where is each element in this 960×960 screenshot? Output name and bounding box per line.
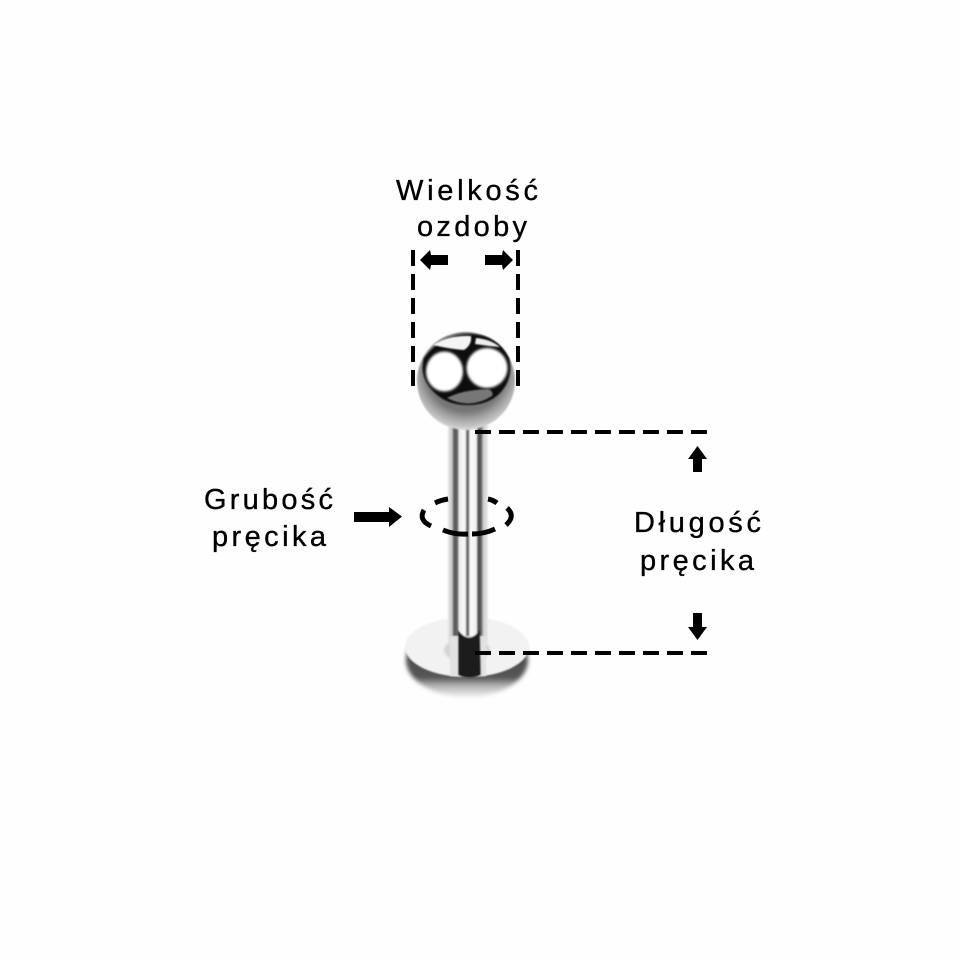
icon: ball end	[417, 332, 515, 430]
label: rod length	[634, 507, 761, 577]
arrow: ornament size left	[420, 250, 448, 270]
label: rod thickness: pręcika	[212, 521, 327, 553]
arrow: rod length down	[688, 613, 707, 640]
label: rod length: Długość	[634, 507, 761, 539]
icon: labret piercing	[405, 332, 529, 697]
dashed lines: ornament width guides	[413, 250, 518, 386]
arrow: ornament size right	[485, 250, 513, 270]
icon: flat disc back	[405, 617, 529, 697]
label: ornament size: ozdoby	[417, 211, 528, 243]
label: rod thickness	[204, 484, 333, 553]
icon: rod shaft	[448, 420, 488, 678]
dashed lines: rod length guides	[475, 432, 707, 653]
dashed ellipse: rod thickness marker	[422, 499, 511, 534]
label: ornament size: Wielkość	[396, 175, 538, 207]
label: ornament size	[396, 175, 538, 243]
arrow: rod length up	[688, 446, 707, 472]
label: rod thickness: Grubość	[204, 484, 333, 516]
arrow: rod thickness	[354, 507, 402, 527]
label: rod length: pręcika	[640, 545, 755, 577]
